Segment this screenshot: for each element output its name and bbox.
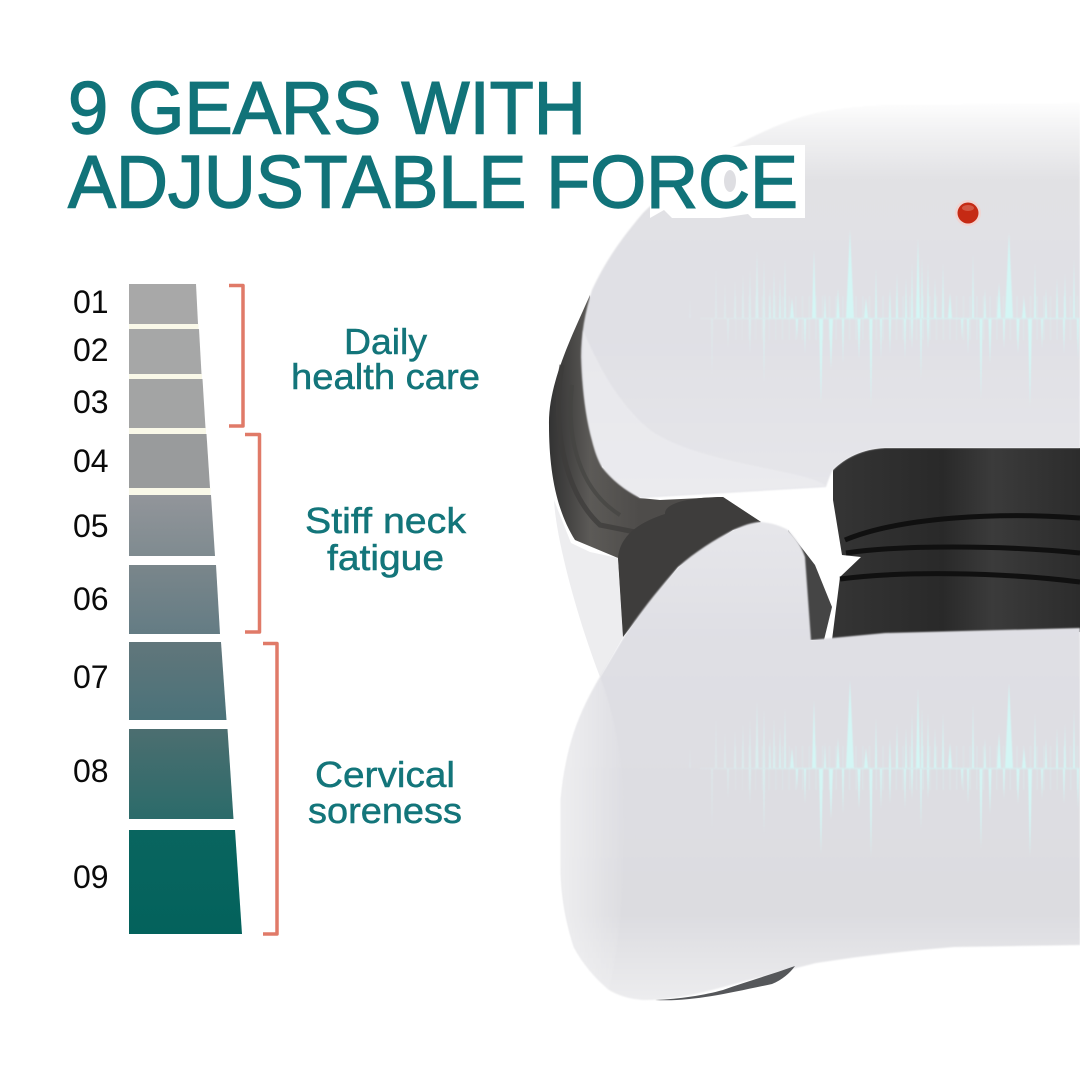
bracket: stiff neck fatigue: [245, 434, 260, 632]
upper shell lower-left highlight: [583, 330, 826, 497]
label: stiff neck fatigue: [305, 500, 467, 578]
title: [68, 66, 798, 224]
bracket: cervical soreness: [263, 644, 277, 934]
label: daily health care: health care: [291, 356, 480, 397]
label: stiff neck fatigue: fatigue: [327, 537, 444, 578]
gear numbers: 01: [73, 284, 109, 320]
bar 09: [129, 830, 242, 934]
neck grooves: [840, 516, 1080, 582]
dark wing ridges: [558, 365, 640, 533]
label: daily health care: [291, 321, 480, 397]
bracket: daily health care: [229, 286, 243, 426]
bar 02: [129, 329, 202, 374]
title: 9 GEARS WITH: [68, 66, 586, 150]
gear numbers: 04: [73, 443, 109, 479]
label: daily health care: Daily: [344, 321, 427, 362]
gear numbers: 07: [73, 659, 109, 695]
label: cervical soreness: soreness: [308, 790, 462, 831]
lower shell left highlight: [561, 677, 625, 990]
gear numbers: 06: [73, 581, 109, 617]
title: ADJUSTABLE FORCE: [68, 140, 798, 224]
gear numbers: 09: [73, 859, 109, 895]
gear numbers: [73, 284, 109, 895]
label: stiff neck fatigue: Stiff neck: [305, 500, 467, 541]
gear numbers: 05: [73, 508, 109, 544]
black neck column: [832, 448, 1080, 640]
dark rear wing: [549, 295, 761, 633]
white halo behind title word FORCE: [650, 145, 805, 218]
dark underside: [655, 966, 795, 1000]
bar 05: [129, 495, 215, 556]
bar 06: [129, 565, 220, 634]
vibration waveform upper: [689, 230, 1080, 407]
bar 07: [129, 642, 226, 720]
white rear sliver: [554, 500, 623, 677]
bar 04: [129, 434, 210, 488]
gear numbers: 02: [73, 332, 109, 368]
dark strut right of bump: [788, 530, 832, 640]
bar 01: [129, 284, 198, 324]
cream separators: [129, 324, 210, 495]
bar 03: [129, 379, 206, 428]
upper white shell: [581, 103, 1080, 498]
vibration waveform lower: [689, 680, 1080, 857]
gear numbers: 08: [73, 753, 109, 789]
red indicator light: [955, 200, 981, 226]
dark wing inner ridge: [571, 385, 620, 515]
gear level scale: [129, 284, 242, 934]
bar 08: [129, 729, 234, 819]
label: cervical soreness: Cervical: [315, 754, 455, 795]
grey gap inside letter C: [724, 170, 736, 192]
dark arm joint: [618, 497, 761, 637]
label: cervical soreness: [308, 754, 462, 831]
lower white shell: [561, 522, 1080, 1000]
gear numbers: 03: [73, 384, 109, 420]
neck massager product illustration: [549, 103, 1080, 1000]
